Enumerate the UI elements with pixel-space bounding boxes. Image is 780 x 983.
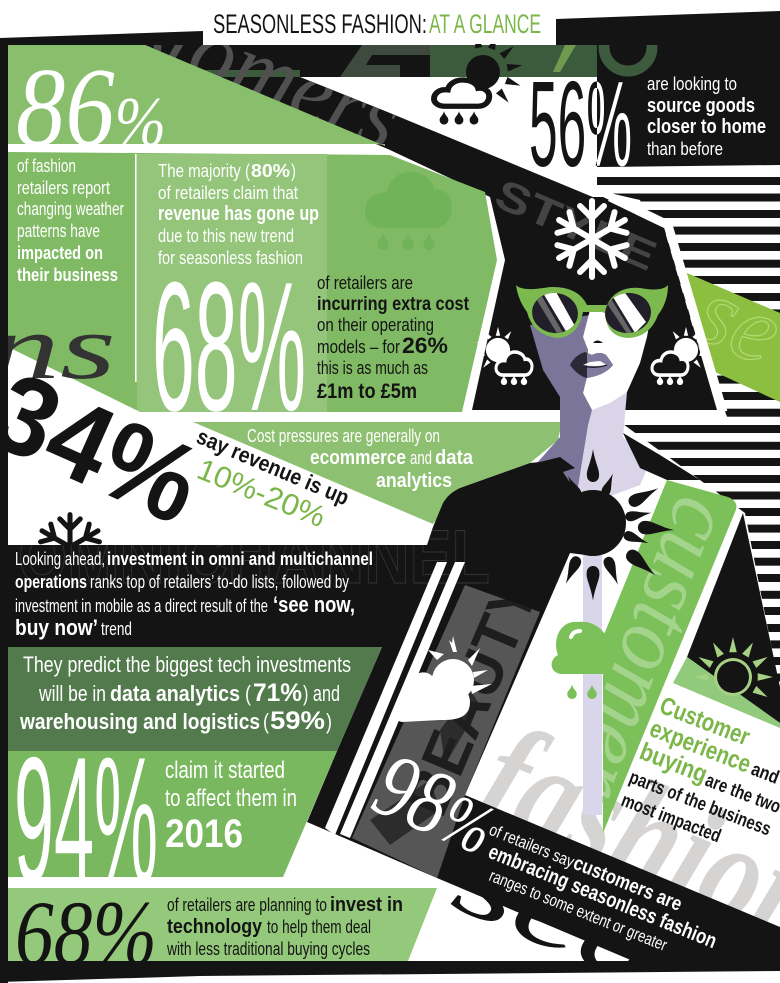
text: extra cost: 26% (402, 333, 448, 358)
left frame (0, 40, 8, 983)
text: extra cost: models – for (317, 337, 400, 357)
text: looking ahead: trend (101, 619, 132, 639)
panel: textured grey (352, 585, 540, 878)
text: cost pressures: Cost pressures are generally on (247, 426, 440, 446)
text: 86% description: of fashion (17, 156, 76, 176)
text: claim started: claim it started (165, 757, 285, 784)
icon: partial snowflake (37, 515, 103, 556)
text: invest in technology: invest in (330, 894, 403, 916)
black jacket and panel (8, 457, 593, 878)
title bar: SEASONLESS FASHION: (213, 9, 427, 39)
text: extra cost: this is as much as (317, 358, 428, 378)
text: cost pressures: analytics (376, 470, 452, 492)
panel: textured grey: BEAUTY (391, 568, 553, 825)
headline 98%: 98% (360, 733, 512, 874)
text: invest in technology: to help them deal (267, 917, 371, 937)
text: source goods: are looking to (647, 74, 737, 94)
text: claim started (165, 757, 297, 856)
text: revenue claim: of retailers claim that (158, 183, 298, 203)
text: revenue claim: The majority ( (158, 161, 250, 181)
panel: customers green band (603, 480, 736, 833)
text: invest in technology: technology (167, 916, 263, 938)
text: looking ahead: ranks top of retailers’ to-do lists, followed by (90, 572, 349, 592)
text: 86% description: patterns have (17, 221, 100, 241)
text: claim started: to affect them in (165, 785, 297, 812)
icon: woman face (530, 310, 650, 500)
text: customer experience: most impacted (618, 790, 724, 847)
icon: snowflake (553, 201, 631, 277)
top right black block (556, 11, 780, 167)
top left black frame (0, 31, 203, 45)
green triangle right (673, 657, 780, 728)
headline 56% (531, 80, 630, 167)
text: invest in technology (166, 894, 403, 959)
text: cost pressures: ecommerce (310, 447, 406, 469)
text: 86% description: impacted on (17, 243, 103, 263)
text: tech investments (19, 652, 351, 735)
white area with script under panel (0, 296, 140, 412)
headline 68% script: 68% (15, 882, 157, 983)
text: tech investments: 59% (270, 707, 325, 735)
text: 86% description: their business (17, 265, 118, 285)
text: extra cost: incurring extra cost (317, 294, 470, 315)
text: 56% (529, 56, 632, 192)
text: tech investments: ) and (303, 681, 340, 706)
panel: lower green (8, 152, 497, 412)
text: tech investments: ( (263, 709, 270, 734)
text: customers embracing: embracing seasonless fashion (485, 840, 720, 953)
icon: pale green cloud (365, 172, 452, 250)
text: tech investments: They predict the biggest tech investments (23, 652, 351, 677)
text: looking ahead: buy now’ (15, 615, 98, 640)
text: revenue claim: ) (291, 161, 296, 181)
text: tech investments: warehousing and logistics (19, 709, 260, 734)
lips (570, 352, 613, 378)
text: say revenue is up: say revenue is up (193, 424, 353, 510)
text: invest in technology: with less traditional buying cycles (166, 939, 370, 959)
black diagonal band with script (145, 45, 593, 197)
text: extra cost: £1m to £5m (317, 380, 417, 403)
lavender strip (583, 555, 602, 815)
top band dark green (430, 45, 658, 77)
text: tech investments: will be in (38, 681, 106, 706)
icon: green cloud (552, 622, 615, 699)
text: source goods (647, 74, 766, 159)
title bar: AT A GLANCE (429, 9, 541, 39)
bottom frame (0, 961, 780, 982)
text: looking ahead: investment in omni and multichannel (107, 549, 373, 569)
text: revenue claim: revenue has gone up (158, 203, 319, 225)
text: 86% description (17, 156, 124, 285)
black wedge right (687, 513, 780, 723)
text: looking ahead: Looking ahead, (15, 549, 105, 569)
text: source goods: source goods (647, 95, 755, 117)
text: customers embracing: customers are (570, 852, 685, 916)
icon: small weather left (475, 327, 532, 385)
icon: weather top (434, 32, 523, 124)
title bar (203, 0, 556, 44)
panel: 94% (8, 751, 337, 877)
icon: big white cloud (394, 636, 492, 722)
icon: green sun (693, 637, 773, 700)
text: tech investments: ( (245, 681, 252, 706)
icon: small weather right (652, 327, 709, 385)
text: revenue claim: for seasonless fashion (158, 248, 303, 268)
panel: upper green (8, 45, 385, 146)
text: customer experience: Customer (656, 691, 754, 751)
text: 10%-20%: 10%-20% (192, 453, 330, 534)
text: customers embracing: ranges to some extent or greater (487, 866, 670, 955)
text: cost pressures: and (410, 448, 432, 468)
text: cost pressures: data (435, 447, 474, 469)
text: revenue claim: 80% (251, 161, 290, 181)
script sea: sea (439, 823, 681, 983)
text: customer experience: experience (646, 714, 755, 779)
text: invest in technology: of retailers are planning to (167, 895, 327, 915)
faint outlined channel text: OMNICHANNEL (18, 515, 490, 600)
nose (593, 340, 603, 343)
icon: sunglasses (516, 285, 668, 338)
panel: customers green band: customers (538, 485, 757, 843)
text: looking ahead: operations (15, 572, 87, 592)
text: customers embracing (485, 820, 720, 955)
text: extra cost (317, 273, 470, 403)
white diagonal stripes (325, 562, 465, 838)
text: tech investments: ) (326, 709, 332, 734)
text: claim started: 2016 (165, 812, 243, 856)
text: looking ahead: ‘see now, (273, 592, 355, 617)
text: customers embracing: of retailers say (487, 820, 577, 872)
icon: hat black panel (472, 197, 717, 410)
text: tech investments: 71% (253, 679, 302, 707)
face shadow (530, 315, 592, 493)
text: 86% description: retailers report (17, 178, 110, 198)
text: looking ahead: investment in mobile as a direct result of the (15, 596, 268, 616)
hat white edge (610, 197, 723, 412)
text: extra cost: on their operating (317, 315, 434, 335)
text: revenue claim: due to this new trend (158, 226, 294, 246)
panel: bottom green (8, 888, 437, 961)
panel: cost pressures (193, 422, 562, 524)
panel: band 98% (437, 795, 780, 961)
text: 56% (529, 56, 632, 192)
text: 68% (152, 243, 306, 449)
icon: black sun (560, 449, 675, 601)
text: customer experience (618, 691, 780, 847)
text: customer experience: buying (636, 737, 711, 789)
text: cost pressures (247, 426, 474, 492)
text: looking ahead (15, 549, 373, 640)
right collar (623, 433, 700, 480)
neck (567, 392, 650, 500)
text: tech investments: data analytics (110, 681, 240, 706)
face light (583, 310, 650, 410)
text: 86% description: changing weather (17, 199, 124, 219)
panel: tech investments (8, 647, 382, 751)
text: revenue claim (158, 161, 319, 268)
hat stamp text: STYLE (488, 170, 663, 280)
text: source goods: than before (647, 139, 723, 159)
background stripes (597, 177, 780, 682)
text: 94% (14, 720, 158, 919)
text: extra cost: of retailers are (317, 273, 413, 293)
headline 86%: 86% (16, 46, 166, 170)
